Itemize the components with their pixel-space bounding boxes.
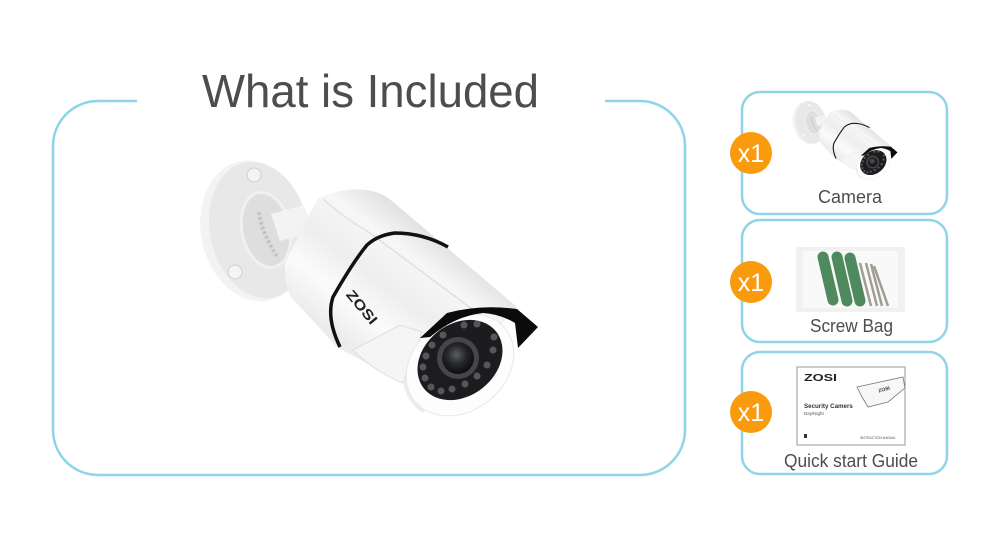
icon: manual: ZOSI xyxy=(878,385,891,394)
badge: x1: x1 xyxy=(738,399,764,427)
panel: quick start guide item xyxy=(730,352,947,474)
icon: manual: ZOSI xyxy=(804,373,837,384)
panel: screw bag item xyxy=(730,220,947,342)
label: Screw Bag: Screw Bag xyxy=(810,316,893,336)
icon: screw bag xyxy=(796,247,905,312)
badge: x1: x1 xyxy=(738,140,764,168)
badge: x1: x1 xyxy=(738,269,764,297)
title: What is Included xyxy=(202,65,539,117)
label: Camera: Camera xyxy=(818,187,883,207)
panel: camera item xyxy=(730,92,947,214)
badge: x1 xyxy=(730,391,772,433)
icon: manual: Security Camers xyxy=(804,403,853,410)
icon: manual: Day/Night xyxy=(804,411,825,416)
icon: main camera xyxy=(187,151,538,437)
badge: x1 xyxy=(730,132,772,174)
icon: manual: INSTRUCTION MANUAL xyxy=(860,436,896,440)
icon: manual xyxy=(797,367,905,445)
label: Quick start Guide: Quick start Guide xyxy=(784,451,918,471)
panel: main xyxy=(53,101,685,475)
badge: x1 xyxy=(730,261,772,303)
icon: small camera xyxy=(789,98,897,186)
brand label: ZOSI: ZOSI xyxy=(343,287,381,327)
